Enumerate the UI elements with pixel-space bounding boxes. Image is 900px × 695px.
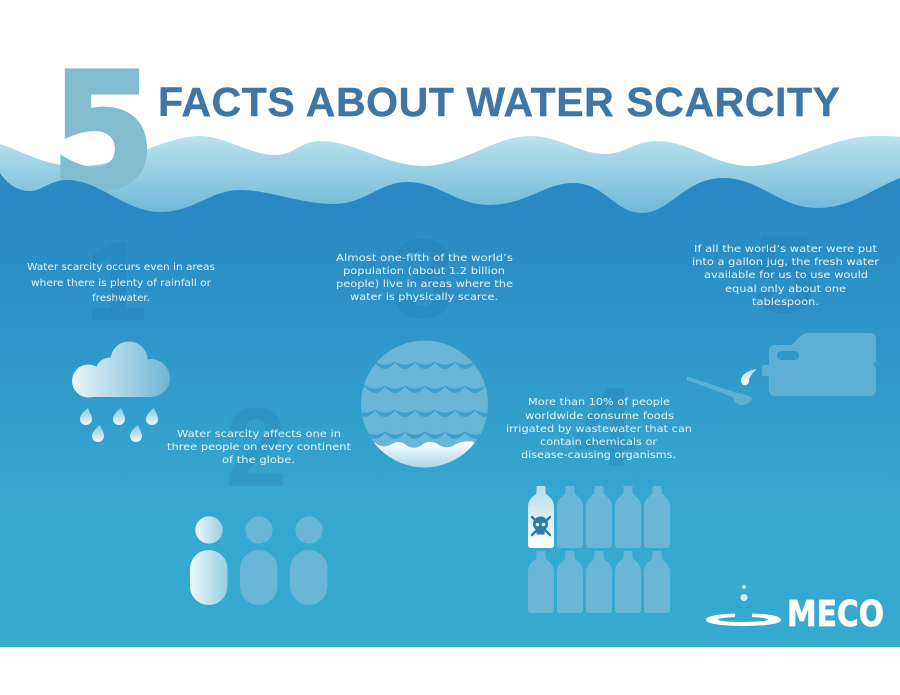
icon: rain drops bbox=[80, 408, 158, 442]
fact 5 text: equal only about one bbox=[725, 284, 846, 295]
icon: water drops bbox=[740, 585, 748, 601]
fact 3 text: population (about 1.2 billion bbox=[343, 266, 505, 277]
icon: spoon bbox=[687, 377, 752, 405]
fact 2 text: Water scarcity affects one in bbox=[177, 429, 341, 440]
background: front water bbox=[0, 173, 900, 647]
icon: bottles bbox=[528, 486, 670, 613]
fact 1 text: Water scarcity occurs even in areas bbox=[27, 262, 215, 273]
panel: fact 1 rainfall bbox=[27, 219, 215, 442]
fact 4 text bbox=[506, 397, 692, 461]
fact 4 text: worldwide consume foods bbox=[525, 411, 674, 422]
fact 3 text: Almost one-fifth of the world’s bbox=[336, 253, 513, 264]
icon: falling drop bbox=[741, 369, 757, 385]
icon: gallon jug bbox=[762, 333, 876, 396]
fact 4 text: More than 10% of people bbox=[528, 397, 670, 408]
ghost numeral 5: 5 bbox=[753, 212, 815, 337]
fact 3 text: water is physically scarce. bbox=[350, 292, 498, 303]
icon: poison bottle bbox=[528, 486, 554, 548]
ghost numeral 3: 3 bbox=[392, 216, 454, 341]
fact 5 text: If all the world’s water were put bbox=[694, 244, 877, 255]
fact 3 text bbox=[336, 253, 513, 303]
fact 4 text: disease-causing organisms. bbox=[521, 450, 676, 461]
icon: three people bbox=[190, 516, 328, 605]
icon: globe of water bbox=[361, 340, 488, 468]
big numeral 5: 5 bbox=[51, 38, 156, 225]
panel: fact 5 gallon jug bbox=[687, 212, 880, 405]
fact 5 text bbox=[692, 244, 880, 308]
logo: MECO bbox=[706, 585, 884, 635]
panel: fact 2 people bbox=[167, 385, 351, 605]
fact 4 text: contain chemicals or bbox=[540, 437, 658, 448]
fact 1 text: freshwater. bbox=[92, 293, 150, 304]
background: back wave bbox=[0, 136, 900, 300]
ghost numeral 2: 2 bbox=[225, 385, 287, 510]
fact 1 text: where there is plenty of rainfall or bbox=[31, 278, 212, 289]
fact 5 text: available for us to use would bbox=[704, 270, 868, 281]
title: FACTS ABOUT WATER SCARCITY bbox=[158, 79, 840, 125]
fact 5 text: tablespoon. bbox=[752, 297, 819, 308]
icon: ripple bbox=[706, 614, 781, 626]
ghost numeral 1: 1 bbox=[85, 219, 147, 344]
ghost numeral 4: 4 bbox=[573, 365, 635, 490]
fact 2 text: three people on every continent bbox=[167, 442, 351, 453]
fact 3 text: people) live in areas where the bbox=[336, 279, 513, 290]
icon: skull and crossbones bbox=[532, 516, 550, 535]
panel: fact 3 physical scarcity bbox=[336, 254, 512, 468]
fact 5 text: into a gallon jug, the fresh water bbox=[692, 257, 880, 268]
fact 1 text bbox=[27, 262, 215, 304]
fact 2 text bbox=[167, 429, 351, 466]
fact 2 text: of the globe. bbox=[222, 455, 295, 466]
fact 4 text: irrigated by wastewater that can bbox=[506, 424, 692, 435]
panel: fact 4 bottles bbox=[506, 365, 692, 613]
icon: rain cloud bbox=[72, 342, 170, 398]
